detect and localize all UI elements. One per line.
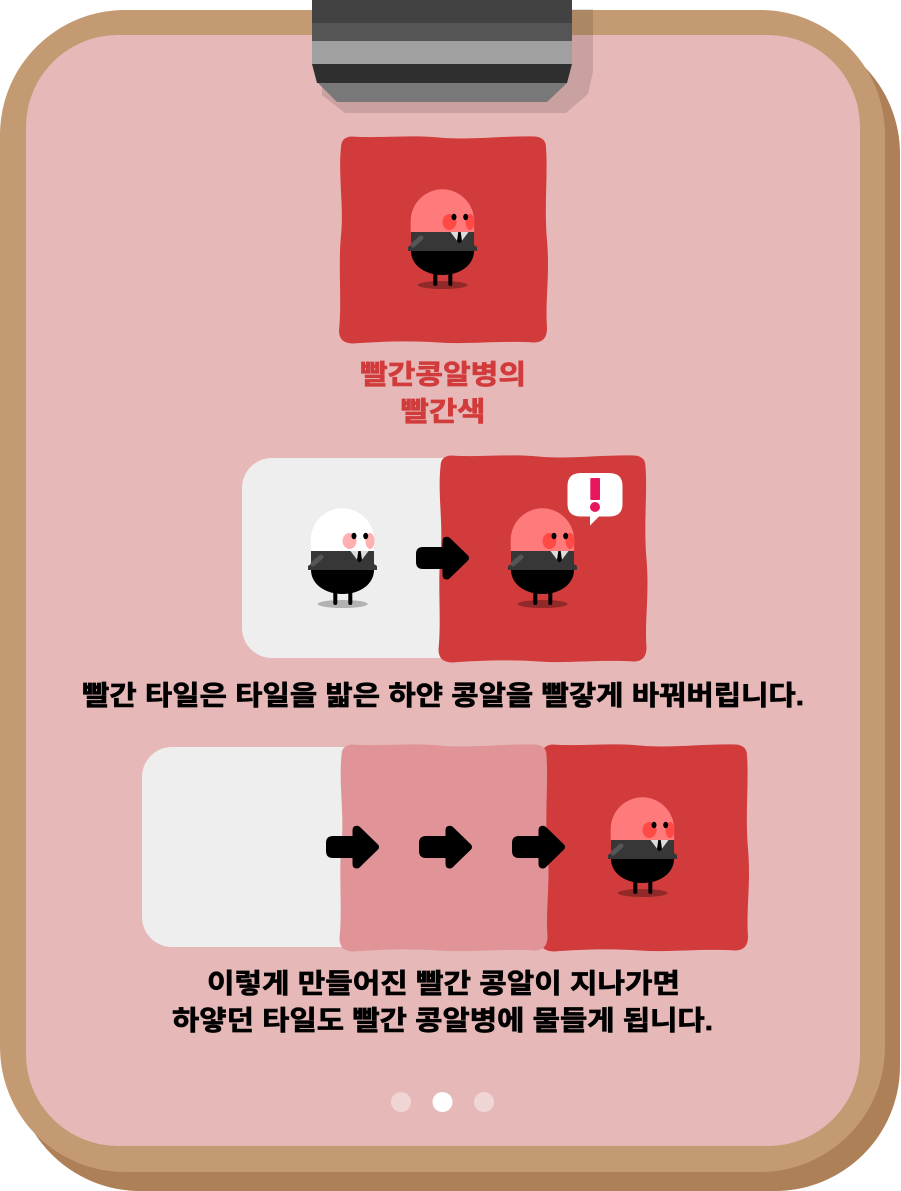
heading: red bean disease: 빨간색 bbox=[400, 397, 486, 427]
icon: red bean character bbox=[408, 189, 477, 289]
heading: red bean disease: 빨간콩알병의 bbox=[360, 360, 526, 390]
panel: red tile with red bean bbox=[339, 136, 548, 344]
arrow bbox=[326, 826, 379, 868]
text: tile effect caption: 빨간 타일은 타일을 밟은 하얀 콩알을 빨갛게 바꿔버립니다. bbox=[82, 681, 804, 711]
arrow bbox=[416, 537, 469, 580]
white tile bbox=[242, 458, 482, 658]
icon: exclamation speech bubble bbox=[568, 473, 622, 526]
text: spreading caption: 하얗던 타일도 빨간 콩알병에 물들게 됩니다. bbox=[172, 1006, 713, 1036]
red tile bbox=[540, 744, 749, 952]
red tile bbox=[339, 136, 548, 344]
icon: white bean character bbox=[308, 508, 377, 608]
panel: white tile turns red bbox=[242, 455, 647, 662]
pagination dots bbox=[391, 1092, 494, 1112]
arrow bbox=[419, 826, 472, 868]
text: spreading caption bbox=[172, 969, 713, 1036]
pink tile bbox=[340, 744, 548, 952]
red tile bbox=[438, 455, 647, 662]
white tile bbox=[142, 747, 382, 947]
arrow bbox=[512, 826, 565, 868]
icon: clipboard clip bbox=[312, 0, 593, 113]
text: spreading caption: 이렇게 만들어진 빨간 콩알이 지나가면 bbox=[207, 969, 680, 999]
icon: red bean character bbox=[508, 508, 577, 608]
panel: spreading across tiles bbox=[142, 744, 749, 952]
heading: red bean disease bbox=[360, 360, 526, 427]
icon: red bean character bbox=[608, 797, 677, 897]
